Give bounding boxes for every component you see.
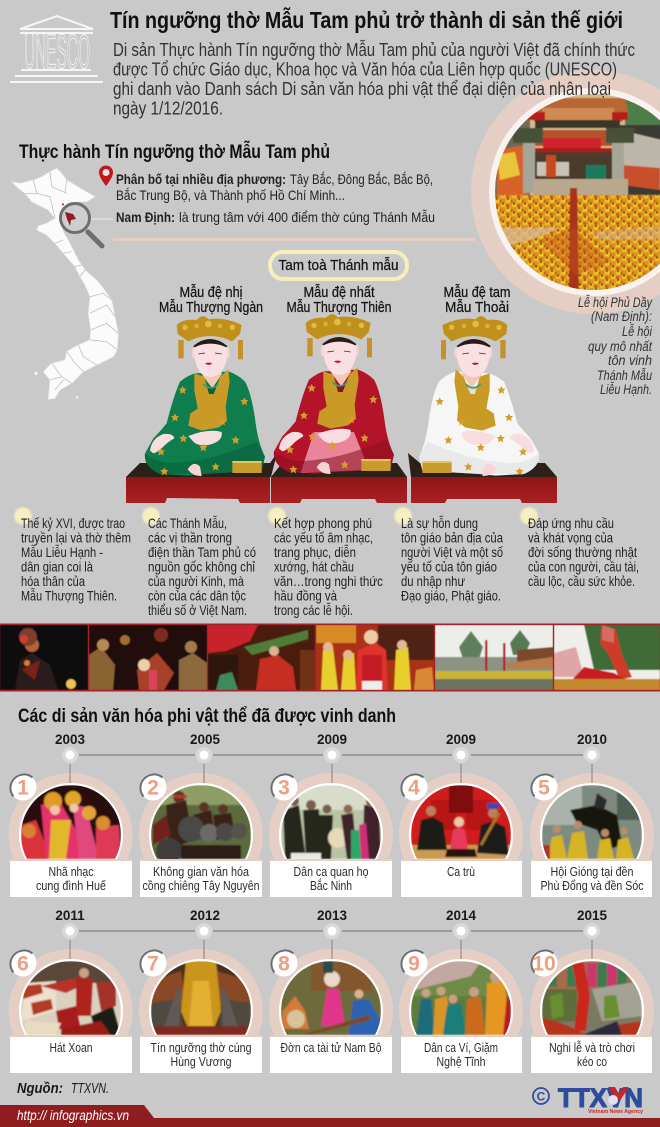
heritage 10: Nghi lễ và trò chơi kéo co: 10 <box>532 952 556 976</box>
text column 4: tôn giáo bản địa của <box>401 530 503 546</box>
statue names: Mẫu Thượng Thiên <box>286 299 392 316</box>
heritage 7: Tín ngưỡng thờ cúng Hùng Vương <box>139 940 263 1073</box>
timeline row 1: 2009 <box>446 732 476 747</box>
text column 1: Mẫu Thượng Thiên. <box>21 588 117 604</box>
heritage 2: Không gian văn hóa cồng chiêng Tây Nguyên: Không gian văn hóa <box>153 864 250 879</box>
heritage 2: Không gian văn hóa cồng chiêng Tây Nguyên: cồng chiêng Tây Nguyên <box>142 878 260 893</box>
festival photo: Lễ hội Phủ Dầy <box>471 70 660 314</box>
statue names: Mẫu đệ tam <box>444 284 510 301</box>
heritage 9: Dân ca Ví, Giặm Nghệ Tĩnh <box>399 940 523 1073</box>
heritage 3: Dân ca quan họ Bắc Ninh: Dân ca quan họ <box>294 864 368 879</box>
intro paragraph: ngày 1/12/2016. <box>113 98 223 118</box>
heritage 4: Ca trù: 4 <box>408 776 420 800</box>
heritage 4: Ca trù: Ca trù <box>447 864 475 879</box>
festival caption: Lễ hội <box>622 324 653 339</box>
icon: UNESCO logo: UNESCO <box>24 25 90 79</box>
heritage 8: Đờn ca tài tử Nam Bộ <box>269 940 393 1073</box>
footer bar <box>0 1105 660 1127</box>
timeline row 2: 2015 <box>577 908 608 923</box>
timeline row 1: 2005 <box>190 732 221 747</box>
timeline row 2: 2011 <box>55 908 85 923</box>
text column 1: hóa thân của <box>21 573 85 589</box>
footer bar: http:// infographics.vn <box>17 1107 129 1123</box>
timeline row 1: 2003 <box>55 732 86 747</box>
heritage 3: Dân ca quan họ Bắc Ninh: Bắc Ninh <box>310 878 352 893</box>
text column 4: du nhập như <box>401 573 465 589</box>
statue names: Mẫu Thượng Ngàn <box>159 299 263 316</box>
heritage 10: Nghi lễ và trò chơi kéo co <box>530 940 654 1073</box>
heritage 10: Nghi lễ và trò chơi kéo co: kéo co <box>577 1054 607 1069</box>
label pill: Tam toà Thánh mẫu <box>270 252 407 279</box>
text column 2: còn của các dân tộc <box>148 588 246 604</box>
heritage 1: Nhã nhạc cung đình Huế: 1 <box>17 776 29 800</box>
heritage 9: Dân ca Ví, Giặm Nghệ Tĩnh: Nghệ Tĩnh <box>436 1054 486 1069</box>
statue: Mẫu Thượng Thiên (red) <box>274 314 394 474</box>
heritage 5: Hội Gióng: 5 <box>538 776 550 800</box>
heritage 3: Dân ca quan họ Bắc Ninh <box>269 764 393 897</box>
heritage 1: Nhã nhạc cung đình Huế: cung đình Huế <box>36 878 107 893</box>
text column 3: hầu đồng và <box>274 588 337 604</box>
text column 4: người Việt và một số <box>401 544 503 560</box>
heritage 8: Đờn ca tài tử Nam Bộ: Đờn ca tài tử Nam Bộ <box>280 1040 382 1055</box>
heritage 7: Tín ngưỡng thờ cúng Hùng Vương: Tín ngưỡng thờ cúng <box>150 1040 252 1055</box>
heading: Các di sản: Các di sản văn hóa phi vật thể đã được vinh danh <box>18 706 396 727</box>
text column 4: yếu tố của tôn giáo <box>401 558 497 574</box>
timeline row 2 <box>55 908 608 939</box>
text column 3: xướng, hát chầu <box>274 558 354 574</box>
heritage 9: Dân ca Ví, Giặm Nghệ Tĩnh: 9 <box>408 952 420 976</box>
logo: TTXVN: TTXVN <box>558 1083 643 1113</box>
text column 5: đời sống thường nhật <box>528 544 637 560</box>
text column 5: và khát vọng của <box>528 530 613 546</box>
heritage 6: Hát Xoan: Hát Xoan <box>50 1040 92 1055</box>
heritage 3: Dân ca quan họ Bắc Ninh: 3 <box>278 776 290 800</box>
text column 2: thiểu số ở Việt Nam. <box>148 602 247 618</box>
text column 4 <box>393 506 503 604</box>
label pill: Tam toà Thánh mẫu: Tam toà Thánh mẫu <box>278 257 398 274</box>
text column 2 <box>141 506 256 618</box>
text column 3: trong các lễ hội. <box>274 602 353 618</box>
divider bar <box>113 238 475 241</box>
logo: TTXVN: C <box>537 1090 546 1104</box>
text column 2: điện thần Tam phủ có <box>148 544 256 560</box>
heritage 2: Không gian văn hóa cồng chiêng Tây Nguyên <box>139 764 263 897</box>
logo: TTXVN: Vietnam News Agency <box>588 1109 644 1115</box>
text column 1: Thế kỷ XVI, được trao <box>21 515 125 531</box>
map of Vietnam <box>12 168 118 399</box>
heritage 5: Hội Gióng <box>530 764 654 897</box>
distribution text: Phân bố tại nhiều địa phương: <box>116 171 286 187</box>
heritage 8: Đờn ca tài tử Nam Bộ: 8 <box>278 952 290 976</box>
photo strip <box>0 624 660 692</box>
heritage 1: Nhã nhạc cung đình Huế: Nhã nhạc <box>48 864 94 879</box>
distribution text: Tây Bắc, Đông Bắc, Bắc Bộ, <box>290 171 433 187</box>
heritage 7: Tín ngưỡng thờ cúng Hùng Vương: 7 <box>147 952 159 976</box>
statue names <box>159 284 510 316</box>
timeline row 2: 2012 <box>190 908 220 923</box>
statue: Mẫu Thượng Ngàn (green) <box>145 316 265 476</box>
text column 2: Các Thánh Mẫu, <box>148 515 227 531</box>
statue: Mẫu Thoải (white) <box>419 316 539 476</box>
statue bases <box>126 453 557 503</box>
festival caption: tôn vinh <box>608 353 652 368</box>
text column 2: nguồn gốc không chỉ <box>148 558 256 574</box>
source note <box>17 1080 109 1097</box>
heritage 7: Tín ngưỡng thờ cúng Hùng Vương: Hùng Vương <box>170 1054 232 1069</box>
source note: TTXVN. <box>71 1080 109 1097</box>
text column 3: văn…trong nghi thức <box>274 573 383 589</box>
text column 1 <box>13 506 131 604</box>
icon: magnifier on Nam Định <box>60 204 113 246</box>
timeline row 2: 2014 <box>446 908 477 923</box>
festival caption <box>578 295 653 397</box>
statue names: Mẫu đệ nhị <box>180 284 242 301</box>
text column 2: các vị thần trong <box>148 530 232 546</box>
heritage 6: Hát Xoan <box>8 940 132 1073</box>
intro paragraph <box>113 39 635 118</box>
text column 1: dân gian coi là <box>21 558 93 574</box>
distribution text <box>116 171 435 225</box>
statue names: Mẫu Thoải <box>445 299 509 316</box>
distribution text: Nam Định: <box>116 209 175 225</box>
text column 4: Đạo giáo, Phật giáo. <box>401 588 501 604</box>
timeline row 1 <box>55 732 607 763</box>
heritage 6: Hát Xoan: 6 <box>17 952 29 976</box>
statue names: Mẫu đệ nhất <box>304 284 374 301</box>
text column 1: truyền lại và thờ thêm <box>21 530 131 546</box>
text column 4: Là sự hỗn dung <box>401 515 478 531</box>
text column 5: Đáp ứng nhu cầu <box>528 515 614 531</box>
text column 5 <box>519 506 639 589</box>
text column 3 <box>267 506 383 618</box>
heading: Thực hành: Thực hành Tín ngưỡng thờ Mẫu Tam phủ <box>19 141 330 163</box>
timeline row 2: 2013 <box>317 908 348 923</box>
heritage 9: Dân ca Ví, Giặm Nghệ Tĩnh: Dân ca Ví, Giặm <box>424 1040 498 1055</box>
source note: Nguồn: <box>17 1080 63 1097</box>
distribution text: Bắc Trung Bộ, và Thành phố Hồ Chí Minh... <box>116 187 345 203</box>
heritage 1: Nhã nhạc cung đình Huế <box>8 764 132 897</box>
text column 2: của người Kinh, mà <box>148 573 244 589</box>
heritage 4: Ca trù <box>399 764 523 897</box>
text column 1: Mẫu Liễu Hạnh - <box>21 544 103 560</box>
icon: location pin <box>99 166 113 186</box>
heritage 2: Không gian văn hóa cồng chiêng Tây Nguyên: 2 <box>147 776 159 800</box>
text column 3: Kết hợp phong phú <box>274 515 372 531</box>
timeline row 1: 2009 <box>317 732 347 747</box>
timeline row 1: 2010 <box>577 732 607 747</box>
heritage 10: Nghi lễ và trò chơi kéo co: Nghi lễ và trò chơi <box>549 1040 635 1055</box>
text column 3: các yếu tố âm nhạc, <box>274 530 373 546</box>
text column 3: trang phục, diễn <box>274 544 356 560</box>
distribution text: là trung tâm với 400 điểm thờ cúng Thánh Mẫu <box>179 209 435 225</box>
heritage 5: Hội Gióng: Hội Gióng tại đền <box>550 864 634 879</box>
icon: UNESCO logo <box>10 16 103 82</box>
